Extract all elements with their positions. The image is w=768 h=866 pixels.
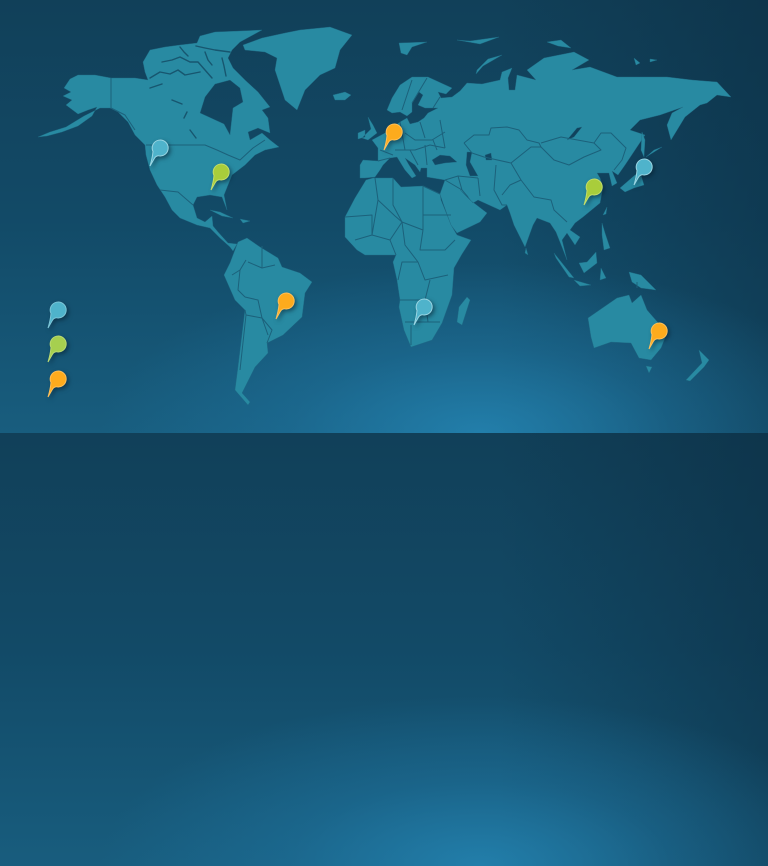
North and Central America with Arctic Canada [38, 30, 279, 251]
pin: orange, Australia [649, 323, 667, 349]
country borders [111, 78, 637, 370]
pin: blue, Japan [634, 159, 652, 185]
pin: blue, southern Africa [414, 299, 432, 325]
South America [224, 238, 312, 405]
Iceland [333, 92, 351, 100]
Africa [345, 178, 471, 347]
legend pin: blue [48, 302, 66, 328]
Australia [588, 295, 667, 360]
panel: bottom empty background [0, 433, 768, 866]
pin: blue, North America west [150, 140, 168, 166]
world map and pins [38, 26, 731, 405]
legend pins [48, 302, 66, 397]
panel: top map background [0, 0, 768, 433]
world map [38, 27, 731, 405]
Arctic channels [150, 46, 230, 138]
legend pin: green [48, 336, 66, 362]
islands: Asia-Pacific and Atlantic [210, 37, 709, 381]
Eurasia [360, 52, 731, 260]
pin: green, China [584, 179, 602, 205]
Greenland [243, 27, 352, 110]
pin: orange, Brazil [276, 293, 294, 319]
pin: orange, Europe [384, 124, 402, 150]
legend pin: orange [48, 371, 66, 397]
pin: green, North America east [211, 164, 229, 190]
